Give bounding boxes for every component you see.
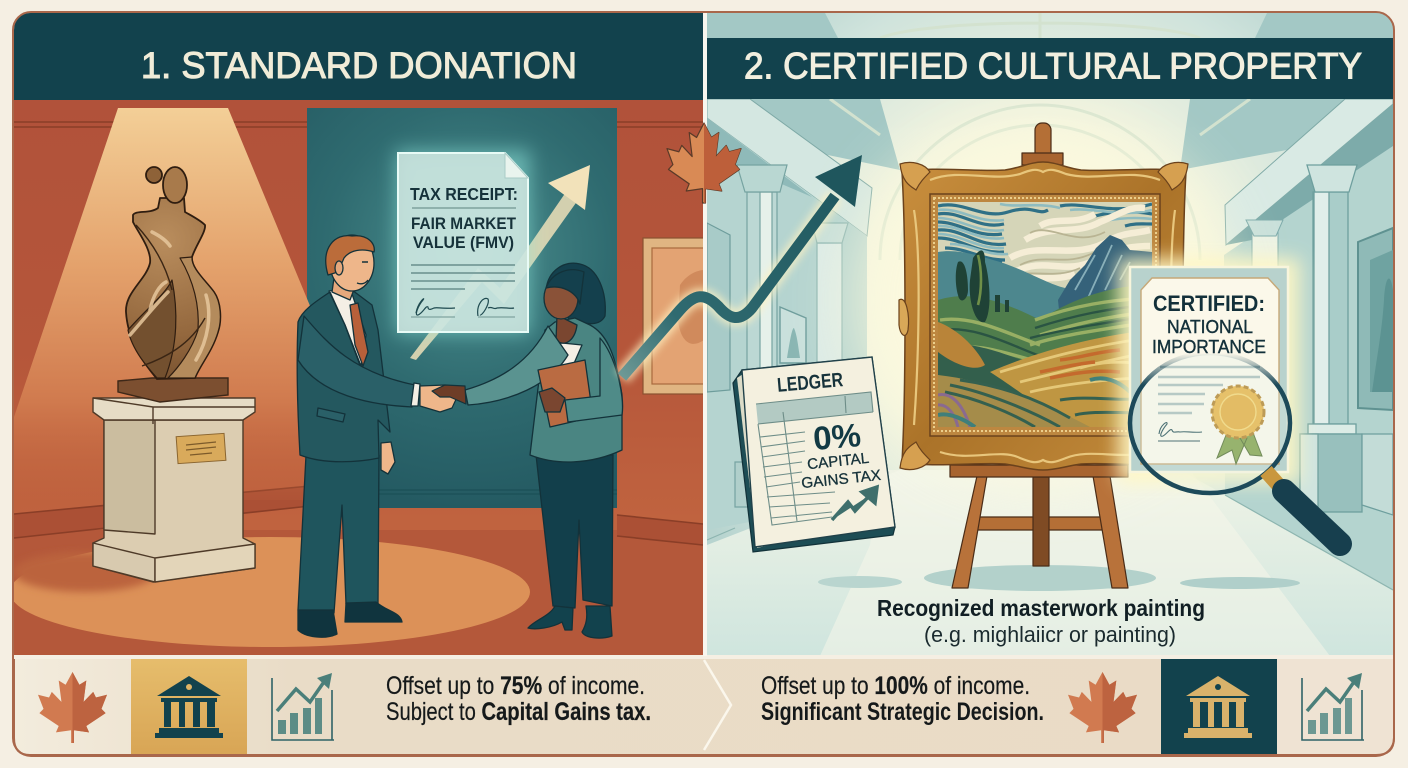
icon: maple leaf right	[1068, 672, 1137, 743]
lens ring	[1130, 353, 1290, 493]
certificate paper	[1141, 278, 1279, 464]
cream rising arrow	[410, 165, 590, 360]
certified heading: CERTIFIED:	[1153, 291, 1265, 316]
small wall frame	[780, 307, 806, 363]
right wall	[1224, 140, 1393, 590]
value label: VALUE (FMV)	[413, 234, 514, 252]
left wall frame	[707, 223, 730, 392]
shoes	[528, 606, 612, 638]
right baseboard	[617, 515, 703, 545]
cypress trees	[956, 250, 1009, 322]
skylight corners	[707, 13, 1393, 170]
statue plinth	[118, 378, 228, 402]
national label: NATIONAL	[1167, 316, 1253, 337]
ledger title: LEDGER	[776, 369, 844, 397]
blue mountain	[1058, 235, 1152, 320]
frame scrollwork	[914, 170, 1175, 462]
receipt title: TAX RECEIPT:	[410, 184, 518, 204]
heading band	[707, 38, 1393, 99]
right icon background	[1277, 659, 1393, 755]
right floor shadow	[1180, 577, 1300, 589]
statue on pedestal	[93, 167, 255, 582]
jacket pocket	[317, 408, 345, 422]
floor highlight	[820, 470, 1330, 656]
painting caption	[877, 595, 1205, 647]
handle	[1284, 491, 1340, 544]
right ceiling beam	[1225, 99, 1393, 245]
blue sky swirls	[938, 204, 1152, 263]
certificate signature	[1158, 423, 1202, 441]
wall mouldings	[14, 122, 703, 545]
neck	[332, 278, 356, 300]
jacket sleeve	[298, 316, 415, 407]
far right column	[1246, 220, 1283, 288]
inner frame	[930, 194, 1160, 436]
head	[330, 235, 374, 291]
ribbon	[1217, 430, 1262, 464]
handshake	[420, 385, 466, 412]
lower hand	[381, 442, 395, 474]
heading: standard donation	[14, 13, 703, 100]
man in suit	[297, 235, 420, 637]
icon: growth chart left	[272, 673, 334, 740]
central glow	[850, 120, 1230, 480]
ornate gold frame	[899, 162, 1188, 470]
text: standard donation summary	[386, 672, 651, 726]
frame side crests	[899, 299, 909, 335]
floor perspective line	[707, 495, 1393, 590]
icon: bank right	[1184, 676, 1252, 738]
tie	[350, 303, 368, 366]
gallery wall	[14, 100, 703, 530]
golden hill	[990, 330, 1152, 427]
brass plaque	[176, 433, 226, 464]
cloud shading	[1010, 230, 1105, 277]
framed painting on wall	[642, 237, 703, 395]
jacket	[530, 318, 622, 462]
lens tint	[1131, 354, 1289, 492]
figure bun	[146, 167, 162, 183]
purple foreground strokes	[938, 394, 970, 427]
left orange bank	[938, 322, 985, 368]
gallery background	[707, 13, 1394, 656]
heading: certified cultural property	[707, 38, 1393, 99]
right ceiling shade	[1226, 104, 1393, 245]
right wall frame	[1358, 228, 1393, 410]
summary line two: Subject to Capital Gains tax.	[386, 698, 651, 726]
gains tax label: GAINS TAX	[800, 467, 882, 492]
heading band	[14, 13, 703, 100]
ledger mini arrow	[832, 487, 877, 520]
heading text: 2. CERTIFIED CULTURAL PROPERTY	[744, 44, 1362, 86]
shirt cuff	[411, 383, 420, 406]
book pages edge	[737, 372, 880, 548]
ledger table header	[756, 392, 873, 424]
summary line one: Offset up to 75% of income.	[386, 672, 645, 700]
arrow shaft	[622, 196, 835, 377]
dark ridge strokes	[940, 305, 1150, 356]
trousers	[536, 455, 613, 608]
bronze figure	[126, 167, 220, 379]
figure body	[126, 198, 220, 379]
text: certified property summary	[761, 672, 1044, 726]
floor	[14, 530, 704, 656]
foreground hill	[938, 375, 1090, 427]
ledger table	[756, 392, 873, 525]
caption example: (e.g. mighlaiicr or painting)	[924, 622, 1176, 647]
gold seal	[1212, 386, 1264, 438]
teal icon box	[1161, 659, 1277, 755]
landscape painting	[938, 202, 1152, 427]
left wall shade	[707, 118, 812, 197]
sky	[938, 202, 1152, 427]
inner frame bead	[934, 198, 1156, 431]
certificate glow	[1118, 258, 1300, 483]
book cover	[733, 357, 895, 552]
mountain ridges	[1075, 245, 1130, 298]
certificate lines	[1158, 367, 1260, 413]
arrow: rising value trend across panels	[622, 155, 862, 377]
arrow glow	[622, 196, 835, 377]
seal inner	[1220, 394, 1256, 430]
figure lower swoosh	[128, 280, 176, 378]
gold icon box	[131, 659, 247, 755]
chevron divider	[704, 660, 731, 750]
summary line one: Offset up to 100% of income.	[761, 672, 1030, 700]
hair	[546, 263, 605, 324]
gold ferrule	[1266, 471, 1281, 488]
teal foreground strokes	[938, 378, 1130, 427]
blouse	[550, 343, 582, 368]
golden strokes	[1000, 338, 1150, 392]
signature rules	[411, 316, 515, 318]
folder	[538, 360, 593, 427]
certificate mount	[1130, 267, 1288, 472]
zero percent: 0%	[812, 416, 862, 457]
face	[544, 277, 578, 319]
figure folds	[136, 225, 205, 366]
left floor shadow	[818, 576, 902, 588]
cream clouds	[1000, 208, 1150, 282]
jacket	[297, 290, 390, 462]
hair	[326, 236, 374, 275]
hair fringe	[546, 270, 584, 304]
icon: maple leaf left	[38, 672, 107, 743]
orange strokes	[1040, 350, 1120, 378]
right column	[1300, 165, 1393, 515]
left wall	[707, 118, 867, 530]
gallery floor	[707, 470, 1393, 656]
tax receipt document	[396, 150, 530, 334]
green ridge strokes	[940, 298, 1150, 365]
frame body	[902, 162, 1186, 470]
icon: growth chart right	[1302, 673, 1364, 740]
left ceiling beam	[707, 99, 872, 236]
certificate	[1118, 258, 1300, 483]
foreground strokes	[945, 380, 1150, 427]
pale sky swirls	[938, 204, 1152, 254]
green hills	[938, 285, 1152, 427]
caption title: Recognized masterwork painting	[877, 595, 1205, 621]
statue highlights	[130, 232, 209, 360]
receipt divider	[412, 207, 516, 209]
pedestal shadow	[13, 552, 157, 592]
teal alcove	[307, 108, 617, 508]
smile and eye	[357, 262, 368, 284]
signatures	[416, 298, 514, 316]
dark green hill	[938, 344, 1045, 427]
sleeve	[465, 326, 568, 405]
summary line two: Significant Strategic Decision.	[761, 698, 1044, 726]
figure head	[163, 167, 187, 203]
panel: certified cultural property	[707, 13, 1394, 656]
heading text: 1. STANDARD DONATION	[141, 44, 577, 86]
folded corner	[505, 153, 528, 178]
skylight arches	[830, 13, 1250, 260]
fair market value label: FAIR MARKET	[411, 215, 516, 233]
arrow head	[815, 155, 862, 207]
book front page	[742, 357, 895, 547]
far sleeve	[565, 338, 623, 422]
panel: standard donation	[10, 100, 713, 656]
second left column	[812, 223, 848, 473]
trousers	[298, 455, 379, 613]
bottom comparison strip	[14, 659, 1394, 755]
left baseboard	[14, 486, 310, 538]
shoes	[298, 602, 402, 637]
magnifying glass	[1130, 353, 1340, 544]
paper sheet	[398, 153, 528, 332]
ear	[335, 261, 343, 275]
woman in teal jacket	[465, 263, 623, 638]
document glow	[396, 150, 530, 334]
distant blue hills	[938, 251, 1065, 330]
wooden easel	[950, 123, 1128, 588]
figure drape	[168, 257, 220, 378]
neck	[556, 315, 577, 343]
panel divider	[703, 13, 707, 656]
shirt	[329, 288, 366, 366]
holding hand	[539, 388, 565, 412]
strip border	[14, 659, 1394, 755]
left column	[735, 165, 790, 507]
easel shadow	[924, 565, 1156, 591]
strip background	[14, 659, 1393, 755]
lapel	[330, 292, 361, 368]
pedestal	[93, 398, 255, 582]
receipt text lines	[411, 265, 515, 289]
frame corners	[900, 162, 1188, 470]
capital label: CAPITAL	[806, 450, 870, 473]
spotlight beam	[14, 108, 310, 493]
floor spotlight pool	[10, 537, 530, 647]
icon: bank left	[155, 676, 223, 738]
ledger book	[733, 357, 895, 552]
tree highlights	[978, 255, 981, 305]
icon: maple leaf over divider	[667, 123, 741, 203]
importance label: IMPORTANCE	[1152, 336, 1266, 357]
